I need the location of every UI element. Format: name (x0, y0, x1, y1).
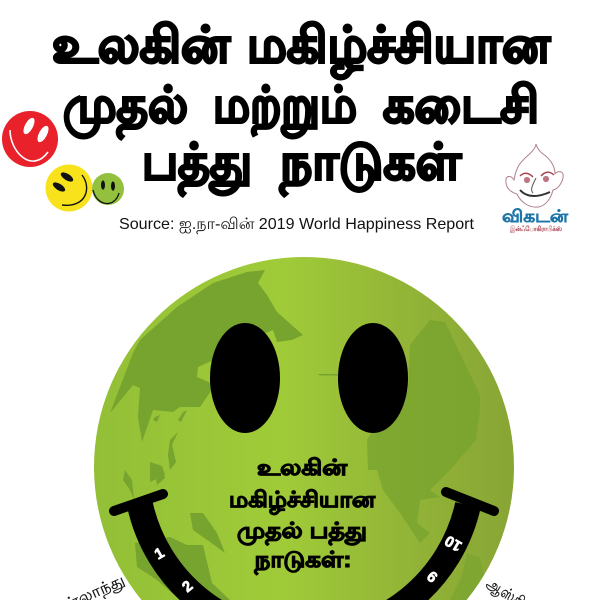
title: நாடுகள் (279, 134, 462, 198)
rank 1: 1 (152, 544, 167, 563)
logo tagline: இன்ஃபோகிராபிக்ஸ் (509, 225, 562, 233)
center heading: நாடுகள்: (253, 547, 352, 575)
title: பத்து (142, 134, 252, 197)
title (52, 17, 551, 198)
logo: Vikatan (502, 144, 569, 233)
title: உலகின் (52, 17, 231, 73)
globe disc (94, 257, 514, 600)
mouth: ranking arc (114, 492, 494, 600)
center heading (229, 455, 376, 575)
right eye (338, 323, 408, 433)
icon: yellow smiley (46, 164, 92, 212)
globe smiley (94, 257, 514, 600)
rank 9: 9 (424, 567, 441, 585)
title: மற்றும் (213, 77, 357, 138)
center heading: முதல் பத்து (237, 518, 367, 546)
center heading: மகிழ்ச்சியான (229, 487, 376, 515)
rank 2: 2 (179, 578, 196, 596)
icon: cartoon face (506, 144, 563, 207)
center heading: உலகின் (257, 455, 348, 480)
title: முதல் (63, 77, 188, 140)
logo wordmark: விகடன் (502, 207, 569, 226)
title: மகிழ்ச்சியான (247, 17, 551, 80)
rank 10: 10 (442, 532, 465, 555)
icon: green smiley (92, 173, 124, 205)
map: continents (110, 270, 484, 600)
left eye (210, 323, 280, 433)
source line: Source: ஐ.நா-வின் 2019 World Happiness Report (119, 216, 475, 233)
title: கடைசி (383, 77, 539, 133)
icon: red smiley (2, 111, 58, 167)
